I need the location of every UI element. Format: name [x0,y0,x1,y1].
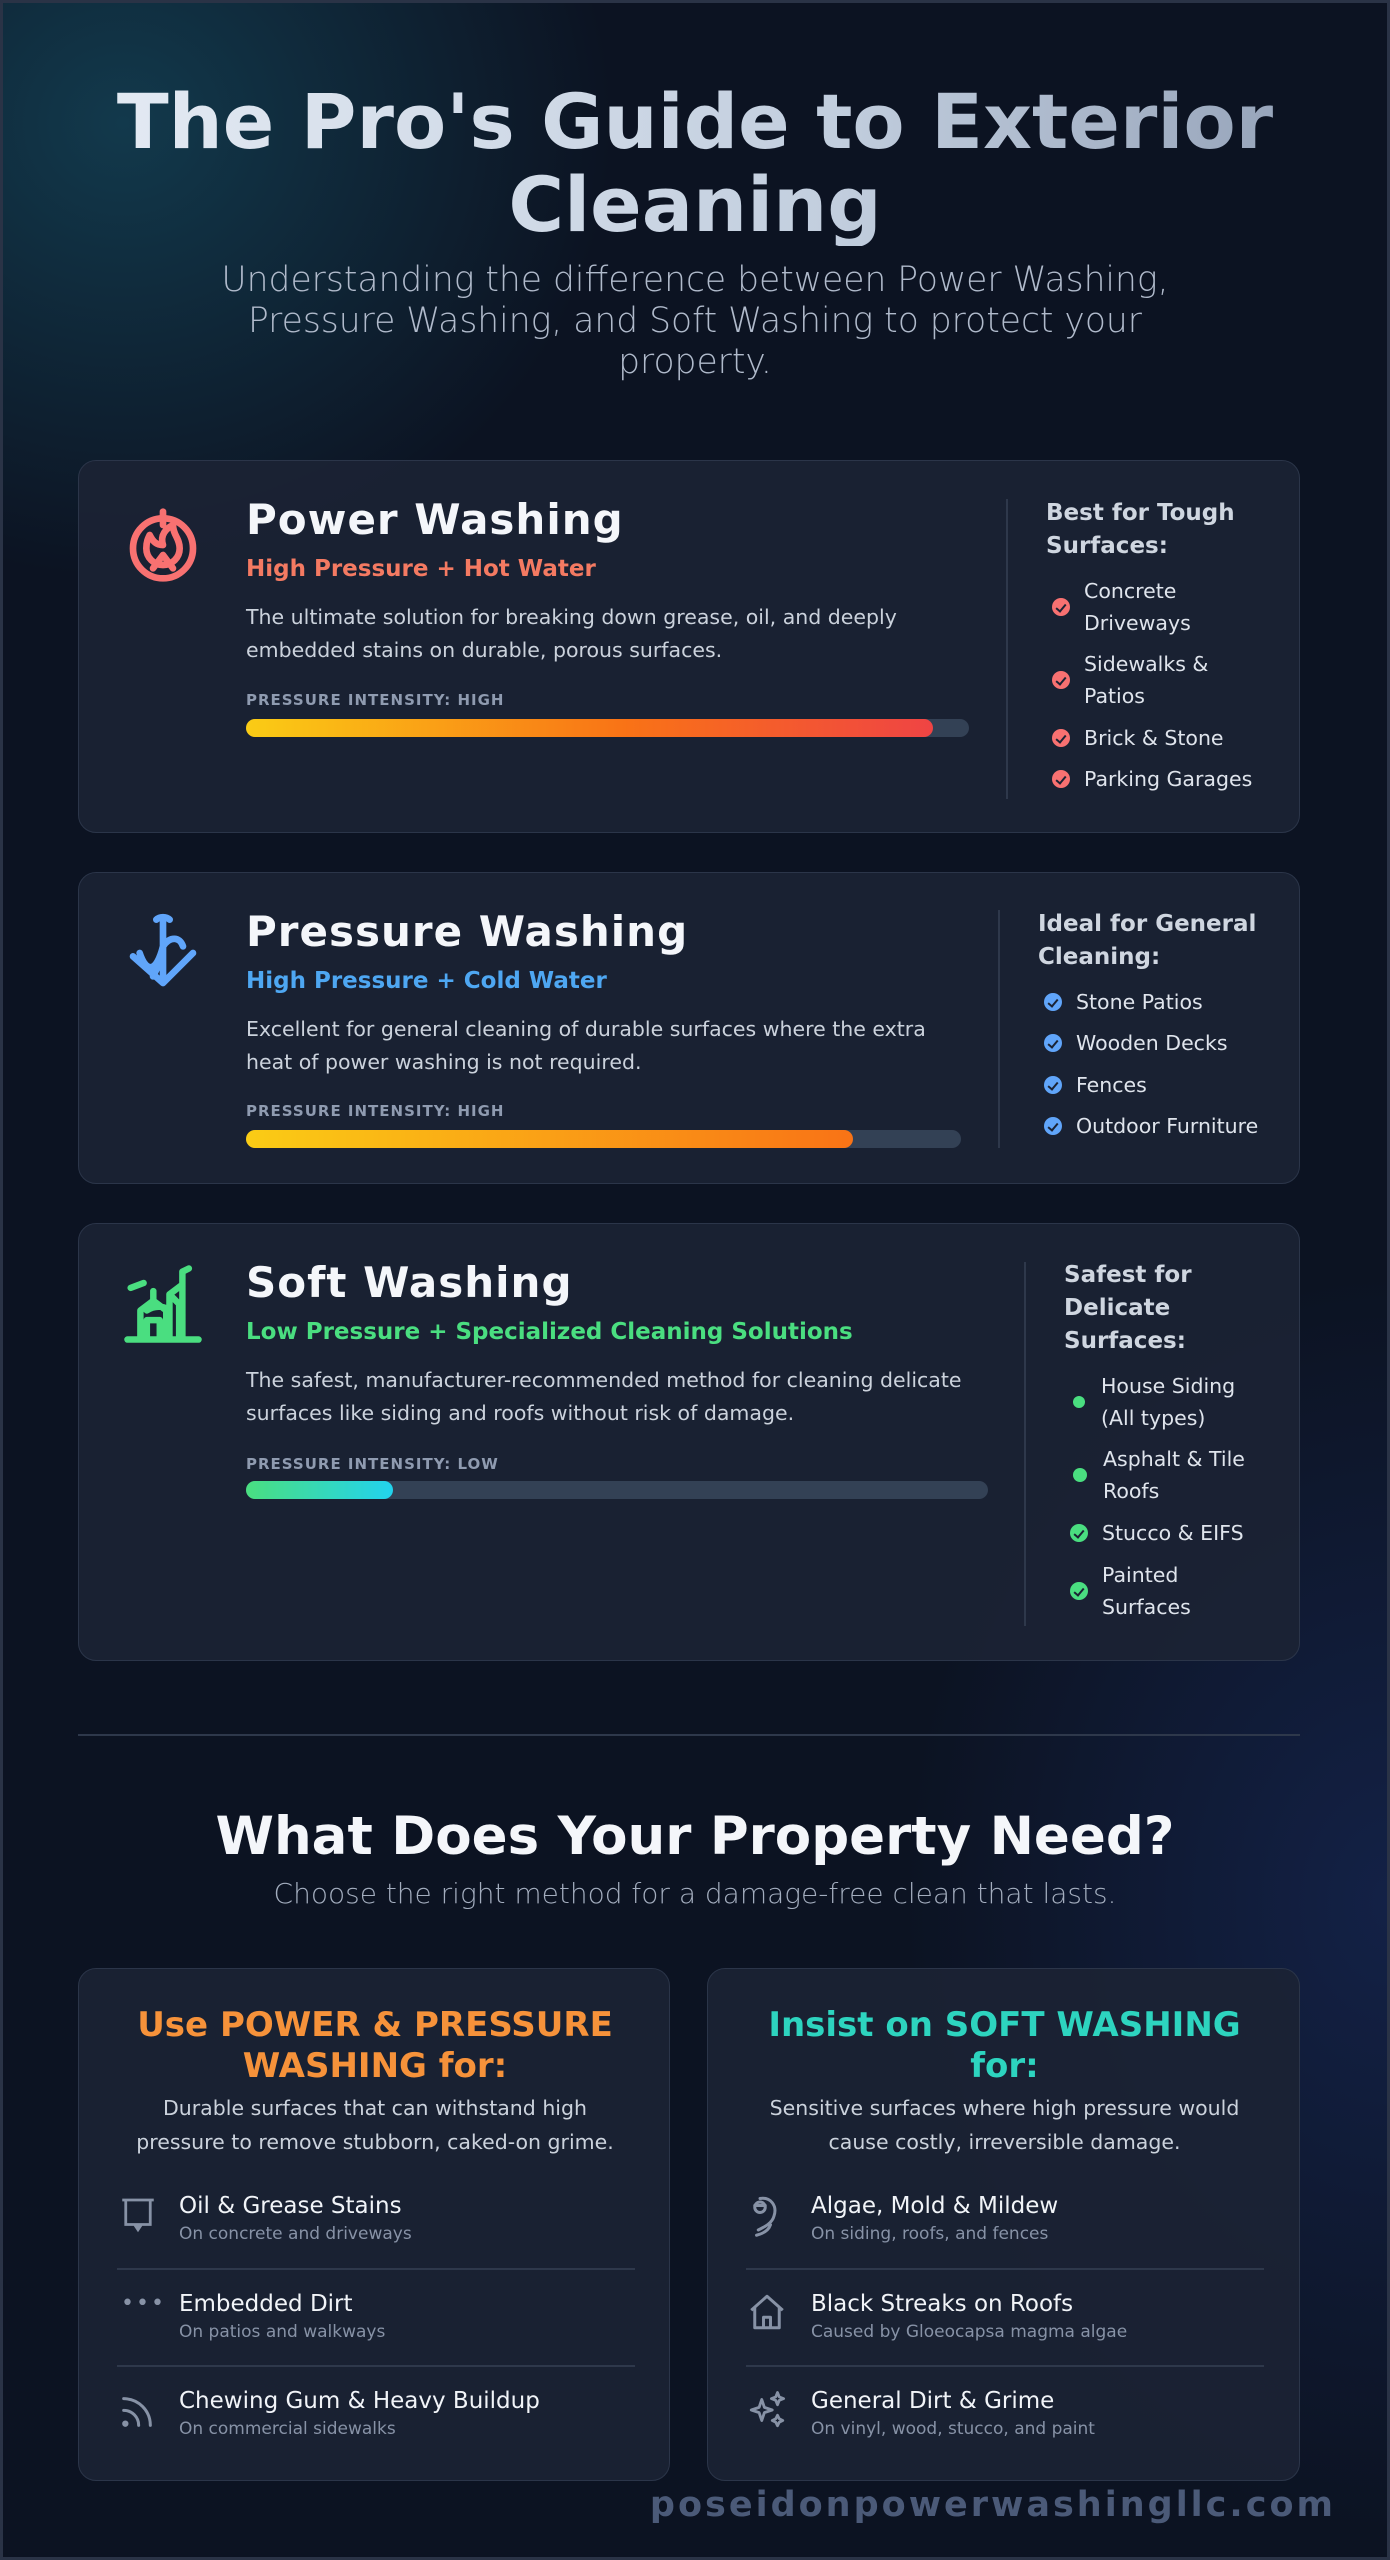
list: tough surfaces: Concrete Driveways [1084,579,1191,635]
item: general dirt: On vinyl, wood, stucco, and paint [811,2419,1095,2439]
list: general cleaning: Fences [1076,1073,1147,1097]
item: general dirt [750,2388,1095,2439]
list: tough surfaces: Parking Garages [1084,767,1252,791]
list: tough surfaces: Brick & Stone [1084,726,1224,750]
item: embedded dirt [121,2291,385,2342]
heading: for: [970,2046,1039,2086]
heading: Soft Washing [246,1258,573,1307]
description: Excellent for general cleaning of durable surfaces where the extra heat of power washing is not required. [246,1017,926,1074]
list: delicate surfaces: House Siding (All types) [1101,1374,1235,1430]
list: tough surfaces: Surfaces: [1046,533,1168,559]
list: delicate surfaces: Safest for [1064,1262,1192,1288]
list: delicate surfaces: Asphalt & Tile Roofs [1103,1447,1245,1503]
subheading: High Pressure + Cold Water [246,968,607,994]
item: chewing gum: Chewing Gum & Heavy Buildup [179,2388,540,2414]
list: delicate surfaces [1064,1262,1245,1619]
item: algae: On siding, roofs, and fences [811,2224,1048,2244]
bar: high [246,1130,961,1148]
item: black streaks: Caused by Gloeocapsa magma algae [811,2322,1127,2342]
subtitle: Understanding the difference between Power Washing, Pressure Washing, and Soft Washing to protect your property. [221,260,1169,382]
list: general cleaning: Cleaning: [1038,944,1160,970]
panel: soft washing uses [707,1968,1300,2481]
list: general cleaning: Stone Patios [1076,990,1203,1014]
heading: Power Washing [246,495,624,544]
item: oil: Oil & Grease Stains [179,2193,402,2219]
item: algae: Algae, Mold & Mildew [811,2193,1058,2219]
item: chewing gum: On commercial sidewalks [179,2419,396,2439]
icon: flame [130,508,196,582]
list: general cleaning: Outdoor Furniture [1076,1114,1258,1138]
footer: website: poseidonpowerwashingllc.com [650,2485,1336,2525]
list: delicate surfaces: Surfaces: [1064,1328,1186,1354]
list: tough surfaces [1046,500,1252,791]
heading: Pressure Washing [246,907,688,956]
heading: Use POWER & PRESSURE [137,2005,613,2045]
bar: low [246,1481,988,1499]
heading [137,2005,613,2086]
item: embedded dirt: On patios and walkways [179,2322,385,2342]
list: general cleaning [1038,911,1258,1138]
list: delicate surfaces: Painted Surfaces [1102,1563,1191,1619]
label: PRESSURE INTENSITY: LOW [246,1455,499,1473]
list: tough surfaces: Best for Tough [1046,500,1235,526]
label: PRESSURE INTENSITY: HIGH [246,691,504,709]
item: black streaks: Black Streaks on Roofs [811,2291,1073,2317]
description: Sensitive surfaces where high pressure would cause costly, irreversible damage. [770,2096,1239,2154]
icon: spray [130,914,196,986]
panel: soft washing [78,1223,1300,1661]
heading [768,2005,1241,2086]
description: The ultimate solution for breaking down grease, oil, and deeply embedded stains on durable, porous surfaces. [246,605,897,662]
heading: Insist on SOFT WASHING [768,2005,1241,2045]
list: delicate surfaces: Delicate [1064,1295,1170,1321]
item: general dirt: General Dirt & Grime [811,2388,1054,2414]
label: PRESSURE INTENSITY: HIGH [246,1102,504,1120]
title [0,80,1390,246]
item: algae [753,2193,1058,2244]
item: black streaks [750,2291,1127,2342]
icon: house spray [124,1265,202,1343]
heading: what does your property need: What Does Your Property Need? [215,1806,1175,1867]
panel: power washing [78,460,1300,833]
description: Durable surfaces that can withstand high pressure to remove stubborn, caked-on grime. [136,2096,614,2154]
bar: high [246,719,969,737]
list: general cleaning: Wooden Decks [1076,1031,1228,1055]
subheading: High Pressure + Hot Water [246,556,596,582]
list: tough surfaces: Sidewalks & Patios [1084,652,1208,708]
item: embedded dirt: ••• [121,2291,166,2316]
item: oil: On concrete and driveways [179,2224,412,2244]
item: chewing gum [122,2388,540,2439]
list: delicate surfaces: Stucco & EIFS [1102,1521,1244,1545]
description: The safest, manufacturer-recommended method for cleaning delicate surfaces like siding and roofs without risk of damage. [246,1368,962,1425]
title: The Pro's Guide to Exterior [117,77,1273,166]
subheading: Low Pressure + Specialized Cleaning Solutions [246,1319,853,1345]
heading: WASHING for: [243,2046,507,2086]
subheading: Choose the right method for a damage-free clean that lasts. [274,1877,1116,1910]
panel: power & pressure uses [78,1968,670,2481]
title: Cleaning [508,160,882,249]
item: embedded dirt: Embedded Dirt [179,2291,353,2317]
list: general cleaning: Ideal for General [1038,911,1256,937]
item: oil [122,2193,412,2244]
panel: pressure washing [78,872,1300,1184]
